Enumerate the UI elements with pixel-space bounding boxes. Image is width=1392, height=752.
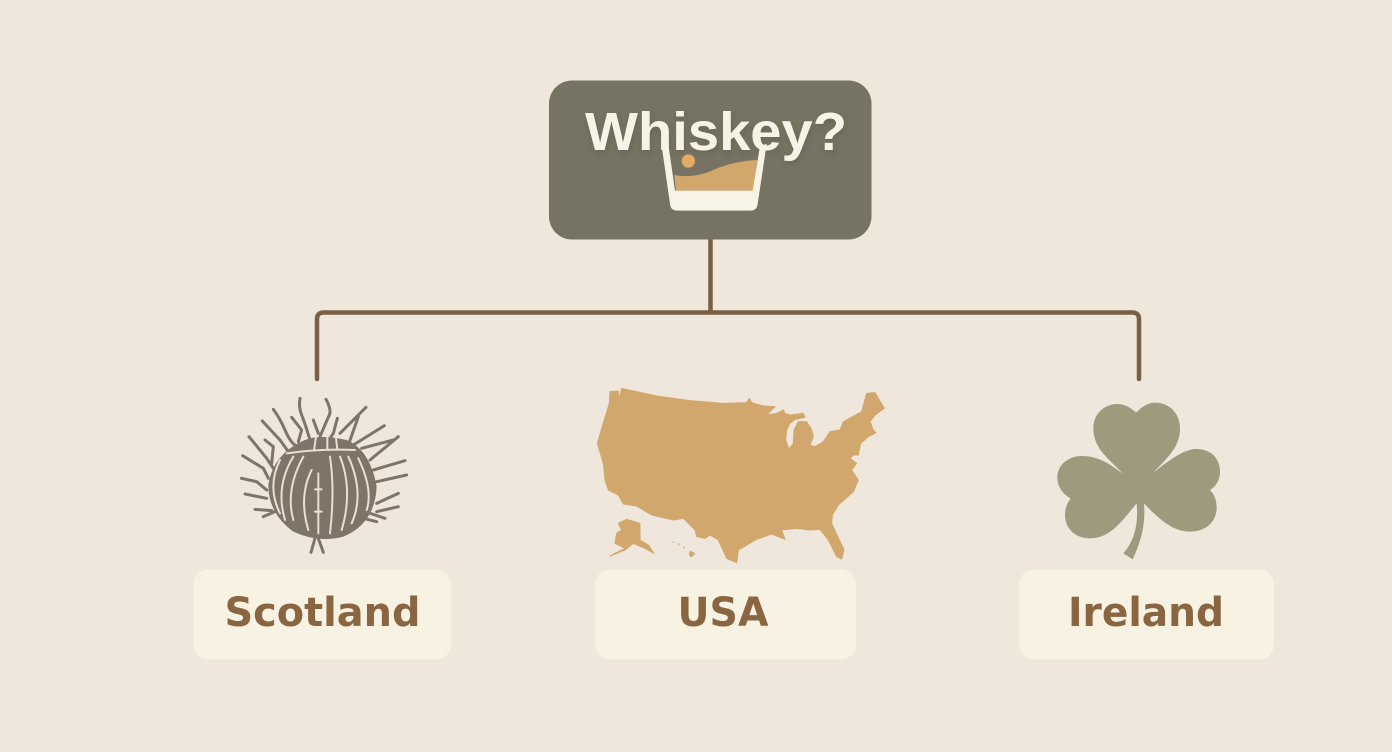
label: USA [595, 570, 856, 660]
label: Scotland: Scotland [224, 590, 420, 636]
icon: USA map [597, 388, 884, 563]
label: Scotland [194, 570, 451, 660]
panel: Whiskey question box [549, 80, 872, 240]
label: Ireland [1019, 570, 1274, 660]
branch: Scotland [194, 398, 451, 660]
icon: shamrock [1057, 403, 1220, 559]
label: Ireland: Ireland [1068, 590, 1224, 636]
connector lines [317, 239, 1139, 379]
icon: Hawaii [673, 541, 695, 557]
label: USA: USA [678, 590, 769, 636]
branch: USA [595, 388, 884, 660]
branch: Ireland [1019, 403, 1274, 660]
icon: Alaska [610, 519, 654, 556]
icon: whiskey glass [662, 144, 767, 211]
icon: thistle [241, 398, 407, 552]
heading: Whiskey?: Whiskey? [585, 102, 847, 162]
